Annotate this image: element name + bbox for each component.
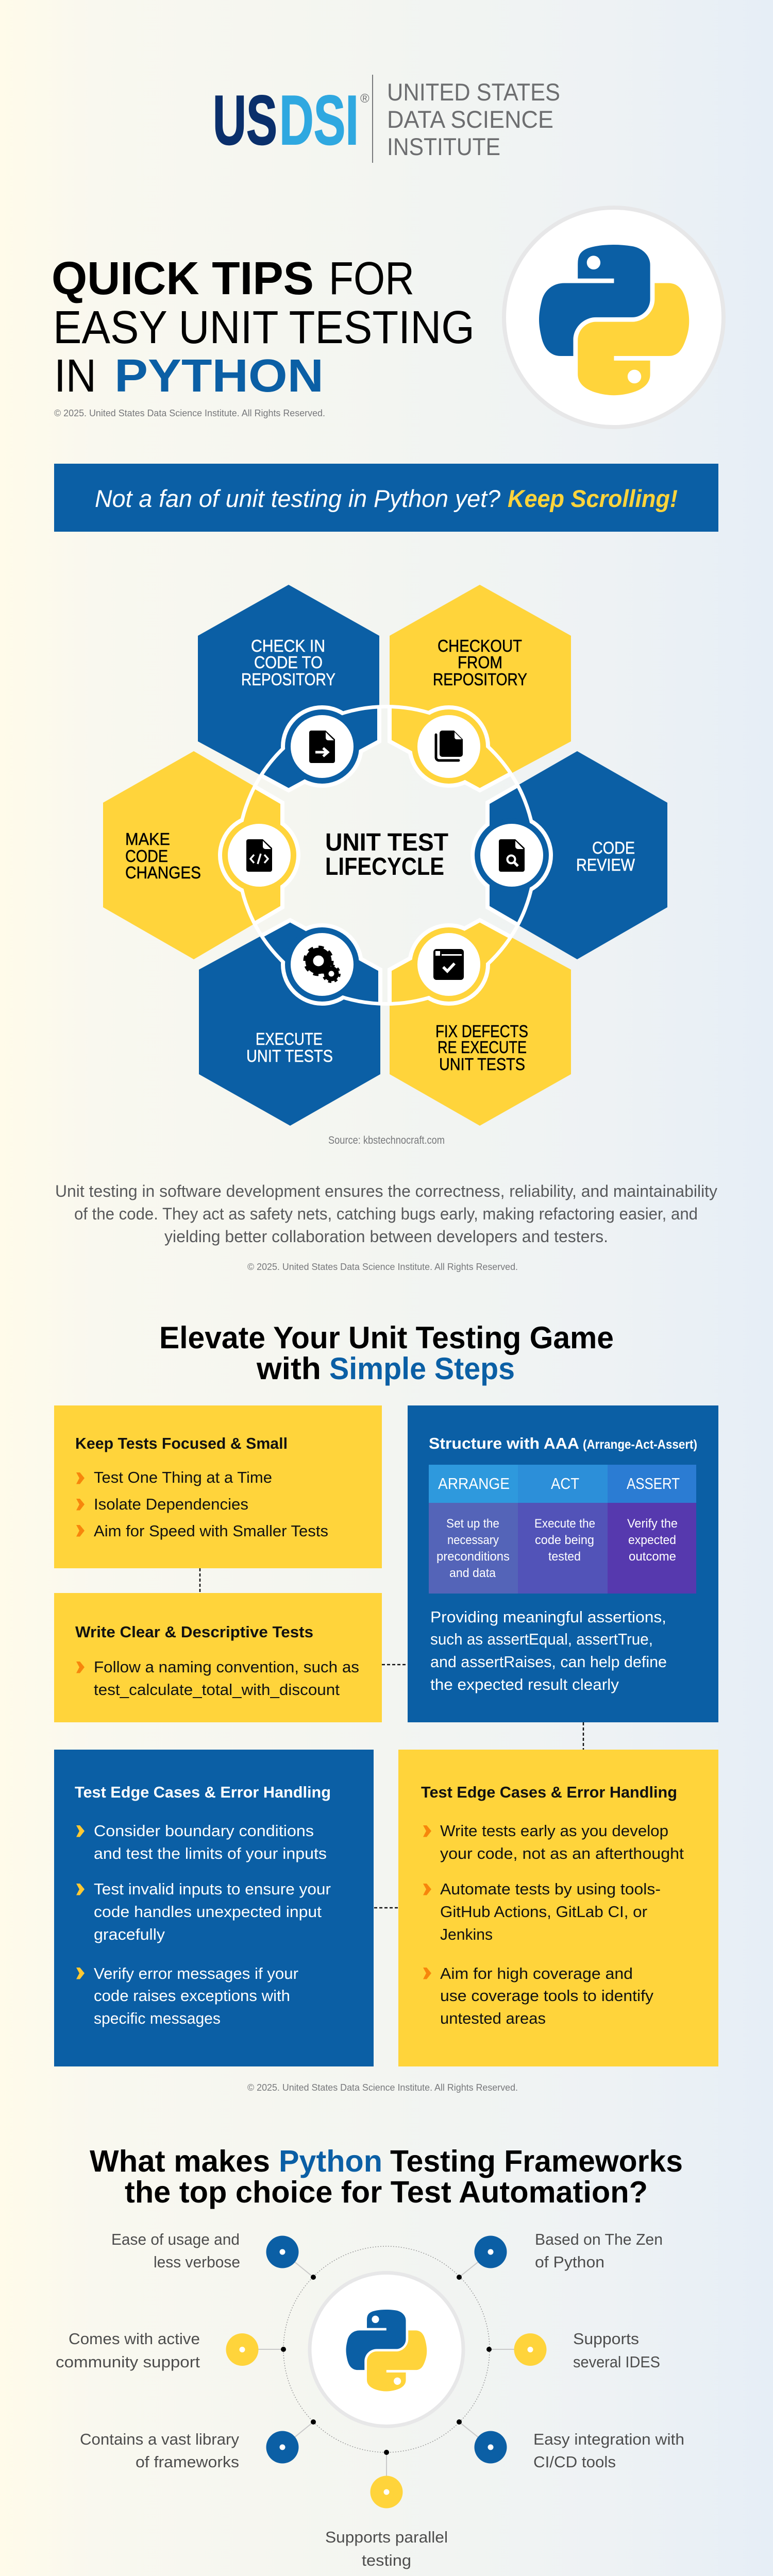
center label: unit test lifecycle: LIFECYCLE (325, 853, 444, 880)
heading: what makes python testing frameworks: the top choice for Test Automation? (125, 2175, 648, 2209)
panel: test edge cases and error handling (blue): Test Edge Cases & Error Handling (75, 1783, 331, 1801)
icon: code file (222, 818, 296, 892)
hexagon label: check in code to repository (241, 636, 335, 689)
panel: test edge cases and error handling (blue): Consider boundary conditions (94, 1822, 314, 1840)
label: several IDES: Supports (573, 2330, 639, 2348)
panel: test edge cases and error handling (blue): code handles unexpected input (94, 1903, 322, 1921)
panel: write clear and descriptive tests (54, 1593, 382, 1722)
panel: test edge cases and error handling (blue): Verify error messages if your (94, 1964, 298, 1982)
panel: keep tests focused and small: Keep Tests Focused & Small (75, 1434, 288, 1452)
hexagon label: make code changes: MAKE (125, 829, 170, 849)
logo: USDSI (213, 75, 560, 163)
heading: elevate your unit testing game: with (256, 1351, 321, 1386)
panel: test edge cases and error handling (blue): gracefully (94, 1925, 165, 1943)
hexagon label: execute unit tests: EXECUTE (256, 1029, 323, 1048)
panel: test edge cases and error handling (yellow): Aim for high coverage and (440, 1964, 633, 1982)
label: community support: Comes with active (69, 2330, 200, 2348)
logo: USDSI: UNITED STATES (387, 78, 560, 106)
hexagon label: fix defects re execute unit tests (435, 1022, 528, 1074)
panel: test edge cases and error handling (blue): code raises exceptions with (94, 1987, 290, 2005)
intro paragraph: Unit testing in software development ensures the correctness, reliability, and maintainability (55, 1182, 717, 1200)
label: ease of usage: less verbose (154, 2253, 240, 2271)
panel: test edge cases and error handling (yellow): untested areas (440, 2009, 546, 2027)
panel: test edge cases and error handling (yellow): use coverage tools to identify (440, 1987, 654, 2005)
table: arrange act assert: ASSERT (627, 1475, 680, 1493)
panel: write clear and descriptive tests: test_calculate_total_with_discount (94, 1681, 340, 1699)
label: CI/CD integration (533, 2430, 684, 2471)
connector dots (281, 2275, 492, 2455)
table: arrange act assert: and data (449, 1566, 496, 1580)
icon halos (218, 705, 553, 1006)
logo: USDSI: DATA SCIENCE (387, 106, 553, 133)
logo: USDSI: DSI (279, 81, 359, 159)
label: zen of python: Based on The Zen (535, 2230, 663, 2248)
panel: test edge cases and error handling (yellow) (398, 1750, 718, 2066)
table: arrange act assert: ACT (551, 1475, 579, 1493)
panel: structure with AAA: Structure with AAA (429, 1434, 579, 1452)
label: several IDES: several IDES (573, 2353, 660, 2371)
label: zen of python (535, 2230, 663, 2271)
chart: python framework benefits radial (56, 2230, 684, 2569)
panel: structure with AAA: such as assertEqual, assertTrue, (430, 1630, 653, 1648)
banner: keep scrolling: Keep Scrolling! (508, 485, 678, 512)
chart: unit test lifecycle hexagons (103, 585, 667, 1126)
table: arrange act assert: necessary (447, 1533, 499, 1547)
hexagon label: make code changes: CODE (125, 846, 168, 866)
panel: test edge cases and error handling (blue) (54, 1750, 374, 2066)
table: arrange act assert: code being (535, 1533, 594, 1547)
table: arrange act assert: preconditions (436, 1550, 510, 1564)
title: EASY UNIT TESTING (53, 302, 475, 353)
hexagon label: fix defects re execute unit tests: FIX DEFECTS (435, 1022, 528, 1041)
hexagon backgrounds (103, 585, 667, 1126)
heading: elevate your unit testing game: Simple Steps (329, 1351, 515, 1386)
panel: structure with AAA: the expected result clearly (430, 1675, 619, 1693)
panel: keep tests focused and small: Isolate Dependencies (94, 1495, 248, 1513)
label: parallel testing: Supports parallel (325, 2528, 448, 2546)
node markers (226, 2236, 546, 2508)
intro paragraph: yielding better collaboration between developers and testers. (164, 1227, 608, 1246)
panel: test edge cases and error handling (yellow): Jenkins (440, 1925, 493, 1943)
hexagon label: code review (576, 838, 635, 874)
label: ease of usage (111, 2230, 240, 2271)
white ring (238, 707, 535, 1004)
table: arrange act assert: Execute the (534, 1517, 595, 1531)
panel: keep tests focused and small: Aim for Speed with Smaller Tests (94, 1522, 328, 1540)
table: arrange act assert: tested (548, 1550, 581, 1564)
panel: keep tests focused and small (54, 1405, 382, 1568)
icon: checkout files (412, 709, 486, 784)
hexagon label: checkout from repository: FROM (458, 653, 502, 672)
dotted ring (283, 2246, 490, 2452)
source note: Source: kbstechnocraft.com (328, 1134, 445, 1146)
label: ease of usage: Ease of usage and (111, 2230, 240, 2248)
title: PYTHON (114, 350, 324, 402)
hexagon label: make code changes (125, 829, 201, 882)
table: arrange act assert: outcome (629, 1550, 676, 1564)
hexagon label: make code changes: CHANGES (125, 863, 201, 882)
panel: structure with AAA: (Arrange-Act-Assert) (583, 1437, 697, 1452)
label: library of frameworks: Contains a vast library (80, 2430, 240, 2448)
dashed connectors (200, 1568, 583, 1908)
logo: USDSI: ® (360, 92, 369, 106)
hexagon label: check in code to repository: REPOSITORY (241, 670, 335, 689)
table: arrange act assert: ARRANGE (438, 1475, 510, 1493)
panel: test edge cases and error handling (blue): specific messages (94, 2009, 221, 2027)
heading: what makes python testing frameworks: Testing Frameworks (390, 2144, 683, 2178)
icon: gears (285, 927, 359, 1002)
banner: keep scrolling: Not a fan of unit testing in Python yet? (95, 485, 500, 512)
title: QUICK TIPS (52, 253, 314, 304)
label: library of frameworks: of frameworks (136, 2453, 239, 2471)
panel: test edge cases and error handling (yellow): Write tests early as you develop (440, 1822, 668, 1840)
hexagon label: execute unit tests (246, 1029, 333, 1065)
icon: check in file (285, 709, 359, 784)
icon: python logo center (310, 2273, 463, 2427)
copyright note: © 2025. United States Data Science Institute. All Rights Reserved. (54, 408, 325, 418)
label: community support: community support (56, 2353, 200, 2371)
heading: elevate your unit testing game (159, 1320, 614, 1386)
panel: write clear and descriptive tests: Write Clear & Descriptive Tests (75, 1623, 313, 1641)
table: arrange act assert: Set up the (446, 1517, 499, 1531)
heading: what makes python testing frameworks: What makes (90, 2144, 270, 2178)
heading: elevate your unit testing game: Elevate Your Unit Testing Game (159, 1320, 614, 1355)
panel: test edge cases and error handling (blue): and test the limits of your inputs (94, 1844, 327, 1862)
hexagon label: check in code to repository: CODE TO (254, 653, 323, 672)
copyright note: © 2025. United States Data Science Institute. All Rights Reserved. (247, 2082, 518, 2093)
label: CI/CD integration: Easy integration with (533, 2430, 684, 2448)
hexagon label: checkout from repository: REPOSITORY (433, 670, 527, 689)
panel: write clear and descriptive tests: Follow a naming convention, such as (94, 1658, 359, 1676)
title: IN (54, 350, 96, 402)
hexagon label: fix defects re execute unit tests: UNIT TESTS (439, 1055, 525, 1074)
copyright note: © 2025. United States Data Science Institute. All Rights Reserved. (247, 1262, 518, 1272)
hexagon label: fix defects re execute unit tests: RE EXECUTE (438, 1038, 527, 1057)
title (52, 253, 475, 402)
connector lines (242, 2252, 530, 2492)
logo: USDSI: INSTITUTE (387, 133, 500, 160)
panel: test edge cases and error handling (yellow): Test Edge Cases & Error Handling (421, 1783, 677, 1801)
logo: USDSI: US (213, 81, 277, 159)
panel: test edge cases and error handling (blue): Test invalid inputs to ensure your (94, 1880, 331, 1898)
table: arrange act assert: Verify the (627, 1517, 678, 1531)
banner: keep scrolling (54, 464, 718, 532)
icon: calendar check (412, 927, 486, 1002)
inner hexagon pieces (243, 708, 530, 1002)
hexagon label: execute unit tests: UNIT TESTS (246, 1046, 333, 1065)
label: zen of python: of Python (535, 2253, 604, 2271)
label: community support (56, 2330, 200, 2371)
intro paragraph: of the code. They act as safety nets, catching bugs early, making refactoring easier, and (74, 1205, 698, 1223)
panel: test edge cases and error handling (yellow): Automate tests by using tools- (440, 1880, 661, 1898)
center label: unit test lifecycle (325, 829, 448, 880)
panel: structure with AAA: and assertRaises, can help define (430, 1653, 667, 1671)
panel: structure with AAA: Providing meaningful assertions, (430, 1608, 666, 1626)
heading: what makes python testing frameworks: Python (279, 2144, 382, 2178)
panel: test edge cases and error handling (yellow): GitHub Actions, GitLab CI, or (440, 1903, 647, 1921)
icon: python logo in circle (504, 208, 724, 427)
heading: what makes python testing frameworks (90, 2144, 683, 2209)
hexagon label: check in code to repository: CHECK IN (251, 636, 325, 655)
label: several IDES (573, 2330, 660, 2371)
title: FOR (329, 253, 414, 304)
intro paragraph (55, 1182, 717, 1246)
center label: unit test lifecycle: UNIT TEST (325, 829, 448, 856)
table: arrange act assert (429, 1465, 696, 1594)
panel: keep tests focused and small: Test One Thing at a Time (94, 1468, 272, 1486)
hexagon label: code review: REVIEW (576, 855, 635, 874)
label: parallel testing (325, 2528, 448, 2569)
table: arrange act assert: expected (628, 1533, 676, 1547)
label: CI/CD integration: CI/CD tools (533, 2453, 616, 2471)
panel: structure with AAA (408, 1405, 718, 1722)
panel: test edge cases and error handling (yellow): your code, not as an afterthought (440, 1844, 684, 1862)
label: parallel testing: testing (362, 2551, 411, 2569)
hexagon label: checkout from repository: CHECKOUT (438, 636, 522, 655)
hexagon label: code review: CODE (592, 838, 635, 857)
hexagon label: checkout from repository (433, 636, 527, 689)
icon: magnifier file (475, 818, 549, 892)
label: library of frameworks (80, 2430, 240, 2471)
